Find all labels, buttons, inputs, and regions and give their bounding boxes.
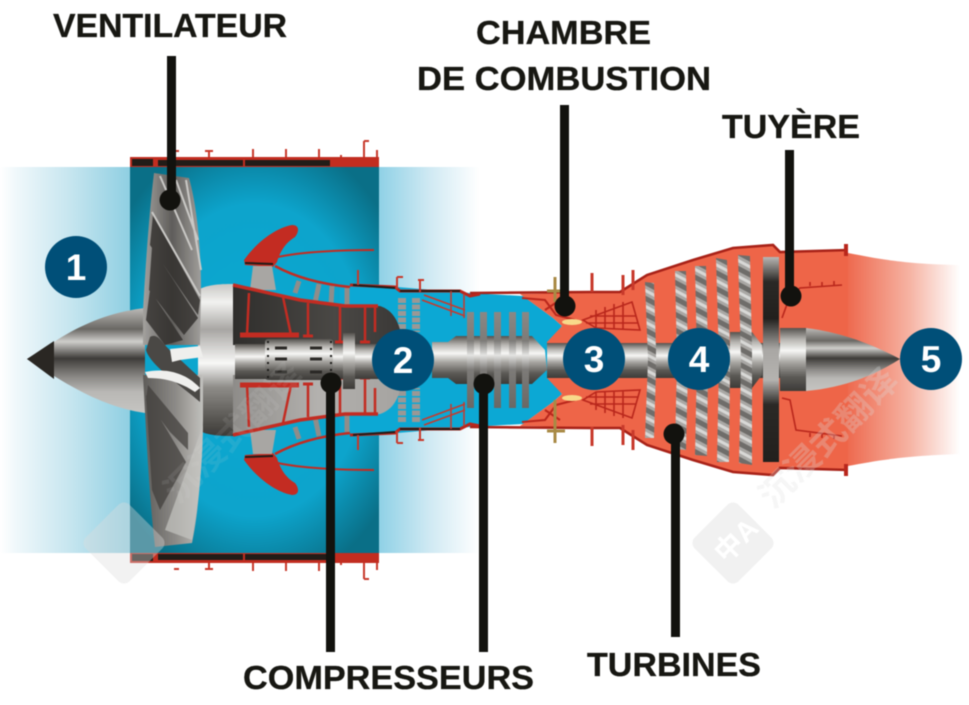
compressor stages: [467, 312, 529, 408]
lower blade dark facets: [146, 385, 188, 510]
core air duct: [340, 286, 562, 434]
tail cone: [806, 328, 900, 391]
forward trapezoid: [247, 293, 291, 335]
combustion chamber, upper: [522, 270, 640, 330]
turbine blades: [645, 255, 752, 465]
posts: [308, 303, 375, 342]
base bar: [240, 332, 299, 338]
nozzle flange: [844, 244, 848, 476]
label: tuyere: TUYÈRE: [722, 108, 860, 145]
final turbine disc: [763, 257, 779, 462]
low-pressure compressor blades: [402, 298, 416, 332]
engine core upper dark half: [233, 284, 403, 345]
lower blade: [143, 375, 203, 547]
stage 5: [738, 255, 752, 465]
swirler: [522, 400, 575, 422]
gearbox cylinder: [265, 339, 333, 380]
thin flow line: [278, 250, 374, 257]
swirler: [522, 298, 575, 320]
stage 2: [675, 271, 688, 450]
stage 4: [509, 312, 516, 408]
base bar: [240, 382, 299, 388]
splitter inner wall: [275, 266, 350, 287]
leader: tuyere: [780, 150, 802, 306]
inlet guide vanes: [295, 281, 347, 306]
main shaft, fan section: [235, 344, 405, 379]
lower blade highlight: [165, 425, 203, 540]
posts: [308, 378, 375, 417]
flame: [562, 319, 582, 325]
gold bolt: [547, 400, 565, 443]
hub cylinder behind fan: [198, 284, 235, 436]
exhaust plume: [848, 253, 960, 466]
rotor collar: [343, 333, 355, 389]
leader: compresseur 1: [320, 372, 342, 652]
gold bolt: [547, 277, 565, 302]
drum slots: [275, 348, 322, 372]
outer casing bar: [130, 157, 379, 167]
turbine shaft: [547, 343, 782, 378]
fan casing, upper with core casing and red structure: [130, 141, 480, 332]
red intake lip: [244, 225, 298, 267]
label: turbines: TURBINES: [587, 646, 761, 683]
watermark: left badge: [80, 499, 168, 587]
fan duct blue panel: [130, 167, 379, 553]
combustion chamber, lower: [522, 390, 640, 450]
number badge 4: 4: [689, 339, 710, 380]
line one: CHAMBRE: [476, 14, 651, 51]
number badge 2: 2: [393, 340, 413, 381]
watermark: left text: 沉浸式翻译: [157, 357, 311, 511]
outer line: [233, 285, 378, 306]
watermark: right badge: 中A: [708, 512, 764, 568]
core casing dark liner: [353, 285, 460, 291]
casing black liner: [132, 159, 330, 166]
stage 4: [716, 258, 730, 462]
number badge 1: 1: [66, 247, 86, 288]
leader: compresseur 2: [474, 374, 494, 652]
nose cone: [27, 308, 145, 413]
stage 3: [695, 266, 708, 456]
liner mesh: [583, 302, 640, 330]
hot section casing, upper edge: [470, 245, 848, 293]
line two: DE COMBUSTION: [417, 60, 711, 97]
outer line: [233, 414, 378, 435]
upper blade: [143, 173, 201, 345]
hot section casing, lower edge: [470, 427, 848, 475]
liner mesh: [583, 390, 640, 418]
leader: chambre de combustion: [554, 105, 576, 316]
upper blade pale edges: [152, 176, 201, 296]
core red frame, lower: [233, 378, 378, 435]
stage 2: [480, 312, 487, 408]
forward trapezoid: [247, 385, 291, 427]
upper blade dark facets: [146, 215, 200, 345]
watermark: right text: 沉浸式翻译: [752, 362, 906, 516]
hot section red body: [520, 245, 848, 475]
feet: [303, 336, 370, 342]
drum rivets: [268, 341, 331, 379]
air flow past the fan duct: [379, 167, 479, 553]
casing flanges: [358, 270, 424, 292]
lower half mirrored structure: [130, 388, 480, 579]
stage 1: [645, 282, 656, 438]
flame: [562, 395, 582, 401]
stage 5: [522, 312, 529, 408]
label: chambre de combustion: [417, 14, 711, 97]
feet: [303, 378, 370, 384]
splitter strut: [250, 266, 276, 290]
stage 3: [494, 312, 501, 408]
number badge 1: [45, 236, 107, 298]
tail collar: [780, 328, 807, 391]
number badge 2: [372, 329, 434, 391]
engine core lower light half: [233, 375, 403, 436]
centre swirl light: [145, 346, 203, 392]
flange ticks: [592, 425, 633, 450]
watermark: right badge: [689, 499, 777, 587]
core red frame, upper: [233, 285, 378, 342]
incoming air, left: [0, 167, 130, 553]
number badge 5: 5: [921, 339, 941, 380]
drum: [265, 339, 333, 380]
core casing line: [350, 285, 480, 296]
intake lip dark strip: [245, 263, 273, 264]
stage 1: [467, 312, 474, 408]
number badge 3: 3: [584, 339, 604, 380]
number badge 3: [563, 328, 625, 390]
nozzle struts: [782, 281, 842, 439]
leader: ventilateur: [160, 56, 180, 210]
turbine collar: [730, 332, 762, 388]
stator braces: [422, 291, 465, 318]
centre swirl dark: [146, 336, 200, 402]
compressor drum: [432, 336, 547, 384]
label: ventilateur: VENTILATEUR: [53, 7, 287, 44]
leader: turbines: [664, 424, 684, 637]
label: compresseurs: COMPRESSEURS: [243, 659, 534, 696]
flange ticks: [592, 270, 633, 295]
number badge 5: [900, 328, 962, 390]
casing ticks: [174, 141, 377, 157]
fan blades: [143, 173, 203, 547]
number badge 4: [668, 328, 730, 390]
nose tip: [27, 341, 54, 379]
